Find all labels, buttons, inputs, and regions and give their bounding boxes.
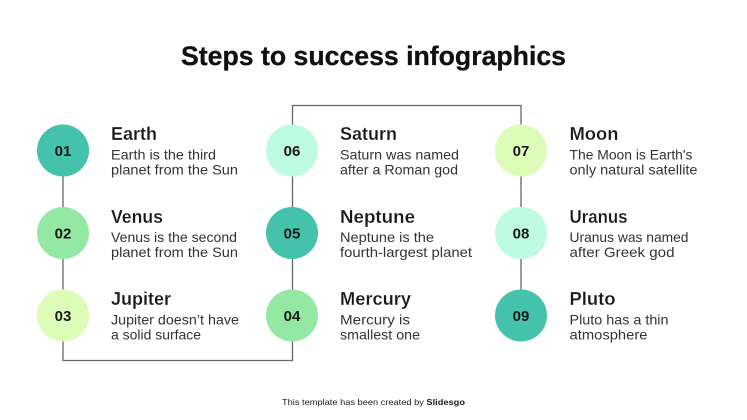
step 05: Neptune: Neptune is the	[340, 230, 434, 245]
step 07: Moon: Moon	[570, 124, 618, 144]
step 09: Pluto: Pluto	[570, 289, 616, 309]
step 05: Neptune: 05	[284, 226, 300, 242]
step 08: Uranus	[495, 207, 688, 260]
step 06: Saturn: after a Roman god	[340, 162, 458, 178]
step 01: Earth: Earth	[111, 124, 157, 144]
step 03: Jupiter: 03	[55, 308, 71, 325]
step 02: Venus: planet from the Sun	[111, 245, 238, 260]
step 08: Uranus: after Greek god	[570, 245, 674, 260]
step 01: Earth: Earth is the third	[111, 148, 216, 162]
footer credit: This template has been created by Slidesgo	[282, 397, 465, 407]
step 05: Neptune	[266, 207, 472, 260]
step 06: Saturn	[266, 124, 459, 178]
step 07: Moon: 07	[513, 143, 529, 160]
step 06: Saturn: 06	[284, 143, 300, 160]
step 06: Saturn: Saturn was named	[340, 148, 459, 162]
step 08: Uranus: Uranus	[570, 207, 628, 227]
step 07: Moon: The Moon is Earth's	[570, 148, 693, 162]
step 03: Jupiter: a solid surface	[111, 328, 201, 342]
step 03: Jupiter	[37, 289, 239, 342]
step 04: Mercury: Mercury is	[340, 312, 410, 328]
step 04: Mercury: smallest one	[340, 328, 420, 342]
step 04: Mercury	[266, 289, 420, 342]
step 09: Pluto: Pluto has a thin	[570, 312, 668, 328]
step 01: Earth: 01	[55, 143, 71, 160]
step 05: Neptune: Neptune	[340, 207, 415, 227]
step 03: Jupiter: Jupiter	[111, 289, 171, 309]
step 09: Pluto: atmosphere	[570, 328, 648, 342]
step 09: Pluto: 09	[513, 308, 529, 325]
step 08: Uranus: 08	[513, 226, 529, 242]
step 02: Venus: Venus is the second	[111, 230, 237, 245]
step 01: Earth	[37, 124, 238, 178]
step 02: Venus	[37, 207, 238, 260]
step 01: Earth: planet from the Sun	[111, 162, 238, 178]
step 06: Saturn: Saturn	[340, 124, 397, 144]
step 05: Neptune: fourth-largest planet	[340, 245, 472, 260]
step 09: Pluto	[495, 289, 668, 342]
step 07: Moon	[495, 124, 698, 178]
connector line	[63, 106, 521, 360]
step 03: Jupiter: Jupiter doesn’t have	[111, 312, 239, 328]
step 02: Venus: 02	[55, 226, 71, 242]
step 02: Venus: Venus	[111, 207, 163, 227]
title: Steps to success infographics	[181, 41, 566, 71]
step 04: Mercury: Mercury	[340, 289, 411, 309]
step 04: Mercury: 04	[284, 308, 301, 325]
step 08: Uranus: Uranus was named	[570, 230, 688, 245]
step 07: Moon: only natural satellite	[570, 162, 698, 178]
